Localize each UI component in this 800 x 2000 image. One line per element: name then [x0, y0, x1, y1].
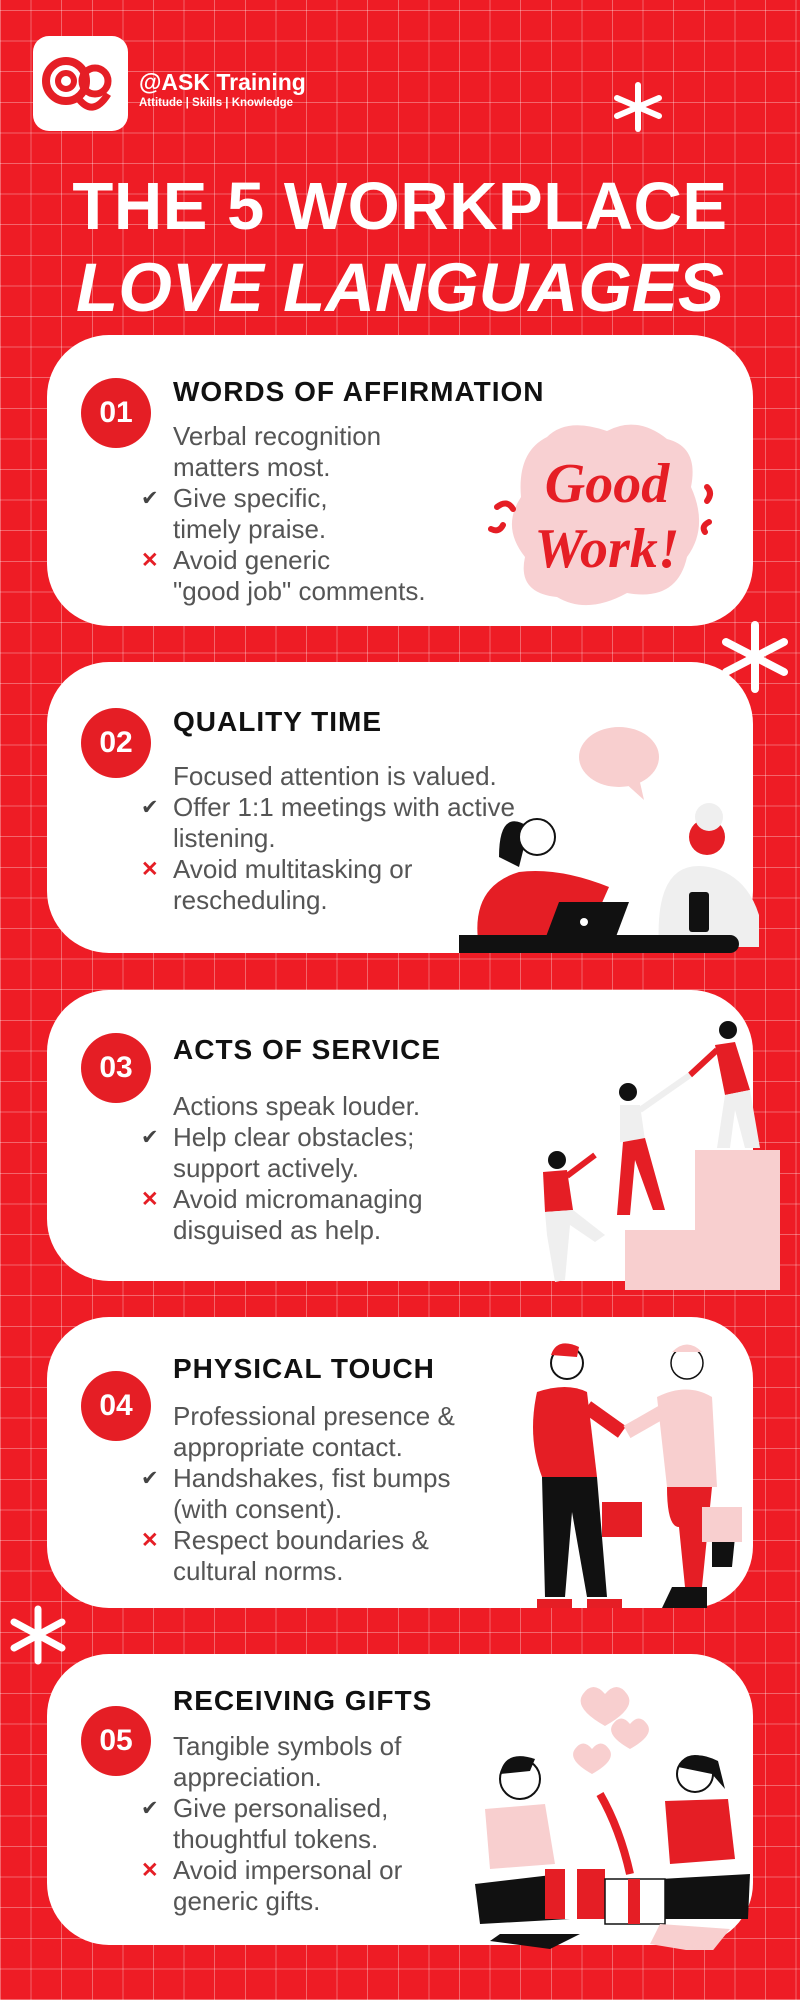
text block: Actions speak louder. — [173, 1091, 420, 1121]
text block: ✔ — [141, 1467, 159, 1490]
text block: Tangible symbols of — [173, 1731, 401, 1761]
text block: disguised as help. — [173, 1215, 381, 1245]
icon: asterisk right — [722, 621, 788, 693]
panel: physical touch — [47, 1317, 753, 1608]
text block: ✕ — [141, 1529, 159, 1552]
text block: ✕ — [141, 858, 159, 881]
text block: Offer 1:1 meetings with active — [173, 792, 515, 822]
text block: support actively. — [173, 1153, 359, 1183]
text block: ✔ — [141, 1126, 159, 1149]
text block: thoughtful tokens. — [173, 1824, 378, 1854]
text block: ✕ — [141, 549, 159, 572]
text block: ✔ — [141, 1797, 159, 1820]
text block: ✔ — [141, 487, 159, 510]
text block: Give personalised, — [173, 1793, 388, 1823]
number 04: 04 — [99, 1389, 133, 1422]
text block: (with consent). — [173, 1494, 342, 1524]
text block: appropriate contact. — [173, 1432, 403, 1462]
number 05: 05 — [99, 1724, 133, 1757]
illustration: good work sticker: Work! — [534, 518, 680, 580]
text block — [141, 1401, 455, 1586]
text block — [141, 1731, 402, 1916]
text block: ✕ — [141, 1188, 159, 1211]
number 01: 01 — [99, 396, 133, 429]
heading: ACTS OF SERVICE — [173, 1034, 441, 1065]
icon: asterisk left — [10, 1606, 66, 1664]
text block: Avoid generic — [173, 545, 330, 575]
text block: generic gifts. — [173, 1886, 320, 1916]
panel: acts of service — [47, 990, 753, 1281]
text block: Focused attention is valued. — [173, 761, 497, 791]
illustration: handshake — [533, 1343, 742, 1608]
text block: cultural norms. — [173, 1556, 344, 1586]
text block: ✔ — [141, 796, 159, 819]
logo icon — [33, 36, 128, 131]
text block: Professional presence & — [173, 1401, 455, 1431]
text block: Give specific, — [173, 483, 328, 513]
heading: PHYSICAL TOUCH — [173, 1353, 435, 1384]
number 03 — [81, 1033, 151, 1103]
panel: receiving gifts — [47, 1654, 753, 1945]
text block: appreciation. — [173, 1762, 322, 1792]
illustration: stairs climb — [543, 1021, 780, 1290]
text block — [141, 421, 426, 606]
logo text — [139, 69, 306, 109]
text block: Avoid impersonal or — [173, 1855, 402, 1885]
text block: "good job" comments. — [173, 576, 426, 606]
text block: Verbal recognition — [173, 421, 381, 451]
illustration: gifts — [475, 1687, 750, 1950]
logo — [33, 36, 306, 131]
text block: Respect boundaries & — [173, 1525, 429, 1555]
text block — [141, 1091, 423, 1245]
panel: quality time — [47, 662, 753, 953]
title: THE 5 WORKPLACE — [72, 169, 728, 244]
illustration: meeting — [459, 727, 759, 953]
illustration: good work sticker — [488, 424, 714, 606]
text block — [141, 761, 515, 915]
number 01 — [81, 378, 151, 448]
text block: matters most. — [173, 452, 330, 482]
text block: listening. — [173, 823, 276, 853]
text block: Help clear obstacles; — [173, 1122, 414, 1152]
text block: Avoid multitasking or — [173, 854, 412, 884]
logo text: Attitude | Skills | Knowledge — [139, 97, 293, 109]
text block: Avoid micromanaging — [173, 1184, 423, 1214]
text block: timely praise. — [173, 514, 326, 544]
number 03: 03 — [99, 1051, 133, 1084]
number 02: 02 — [99, 726, 133, 759]
number 02 — [81, 708, 151, 778]
heading: QUALITY TIME — [173, 706, 382, 737]
panel: words of affirmation — [47, 335, 753, 626]
heading: RECEIVING GIFTS — [173, 1685, 432, 1716]
text block: ✕ — [141, 1859, 159, 1882]
number 05 — [81, 1706, 151, 1776]
title — [72, 169, 728, 326]
heading: WORDS OF AFFIRMATION — [173, 376, 545, 407]
text block: rescheduling. — [173, 885, 328, 915]
logo text: @ASK Training — [139, 69, 306, 95]
icon: asterisk top — [614, 82, 662, 132]
title: LOVE LANGUAGES — [76, 249, 724, 326]
illustration: good work sticker: Good — [545, 453, 670, 515]
text block: Handshakes, fist bumps — [173, 1463, 450, 1493]
number 04 — [81, 1371, 151, 1441]
